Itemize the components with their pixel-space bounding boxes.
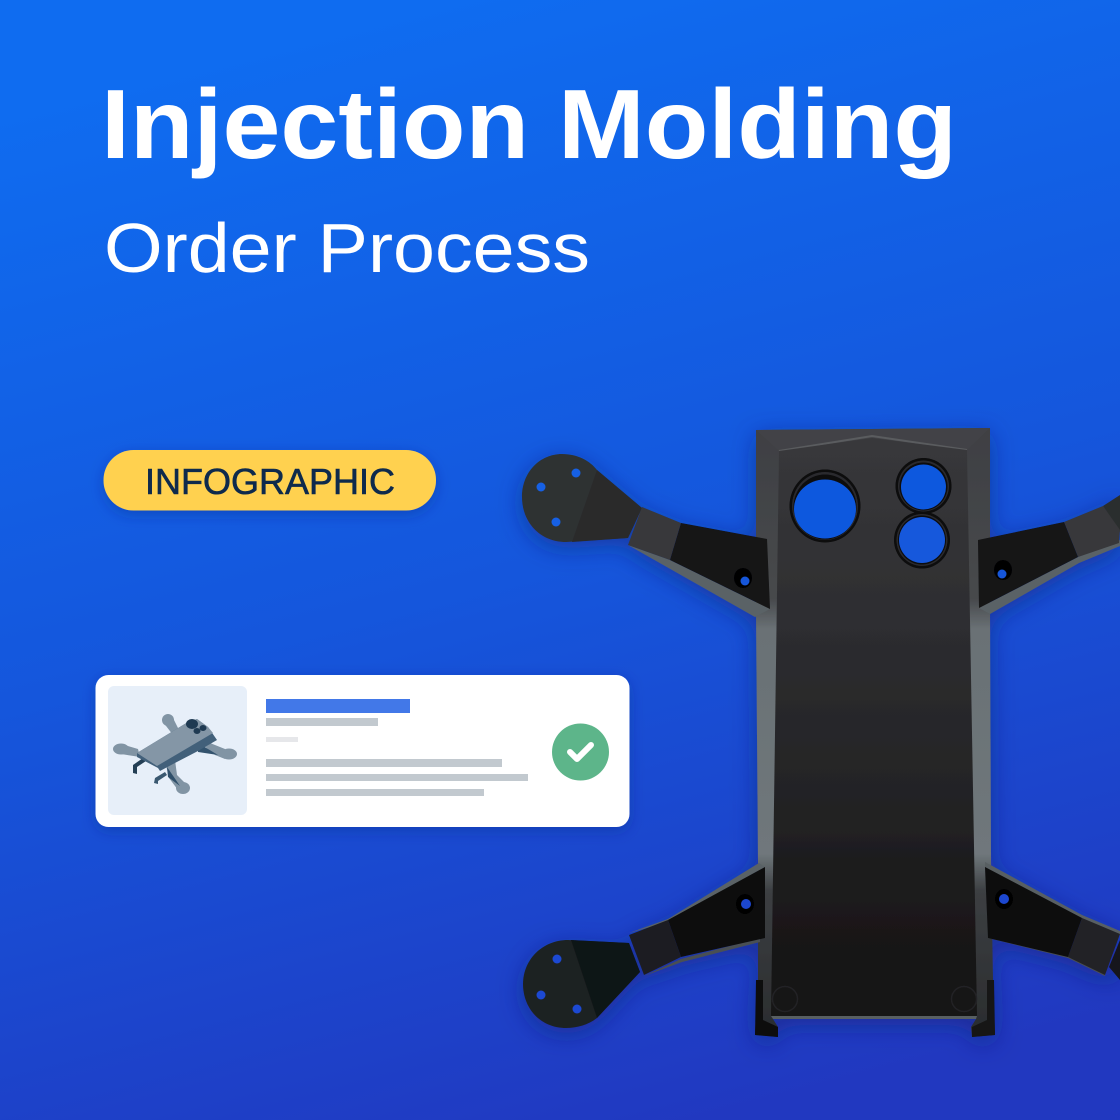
arm: top right [978, 495, 1120, 614]
main body panel [755, 428, 995, 1037]
arm: top left [522, 454, 770, 617]
order card [96, 675, 630, 827]
arm: bottom left [523, 863, 765, 1028]
part thumbnail [108, 686, 247, 815]
molded part photo [522, 428, 1120, 1037]
placeholder subtitle bar [266, 718, 378, 726]
arm: bottom right [985, 862, 1120, 980]
placeholder title bar [266, 699, 410, 713]
icon: green check [552, 724, 609, 780]
screw boss: right [952, 986, 976, 1012]
camera opening: upper small [896, 458, 952, 514]
body outer shell [755, 428, 995, 1037]
placeholder tag bar [266, 737, 298, 742]
title: Injection Molding [101, 69, 957, 179]
camera opening: lower small [894, 512, 950, 568]
subtitle: Order Process [104, 209, 590, 287]
placeholder description lines [266, 759, 528, 796]
camera opening: large [790, 470, 860, 542]
screw boss: left [772, 986, 798, 1012]
badge: infographic [104, 450, 436, 510]
badge: infographic: INFOGRAPHIC [145, 461, 395, 502]
